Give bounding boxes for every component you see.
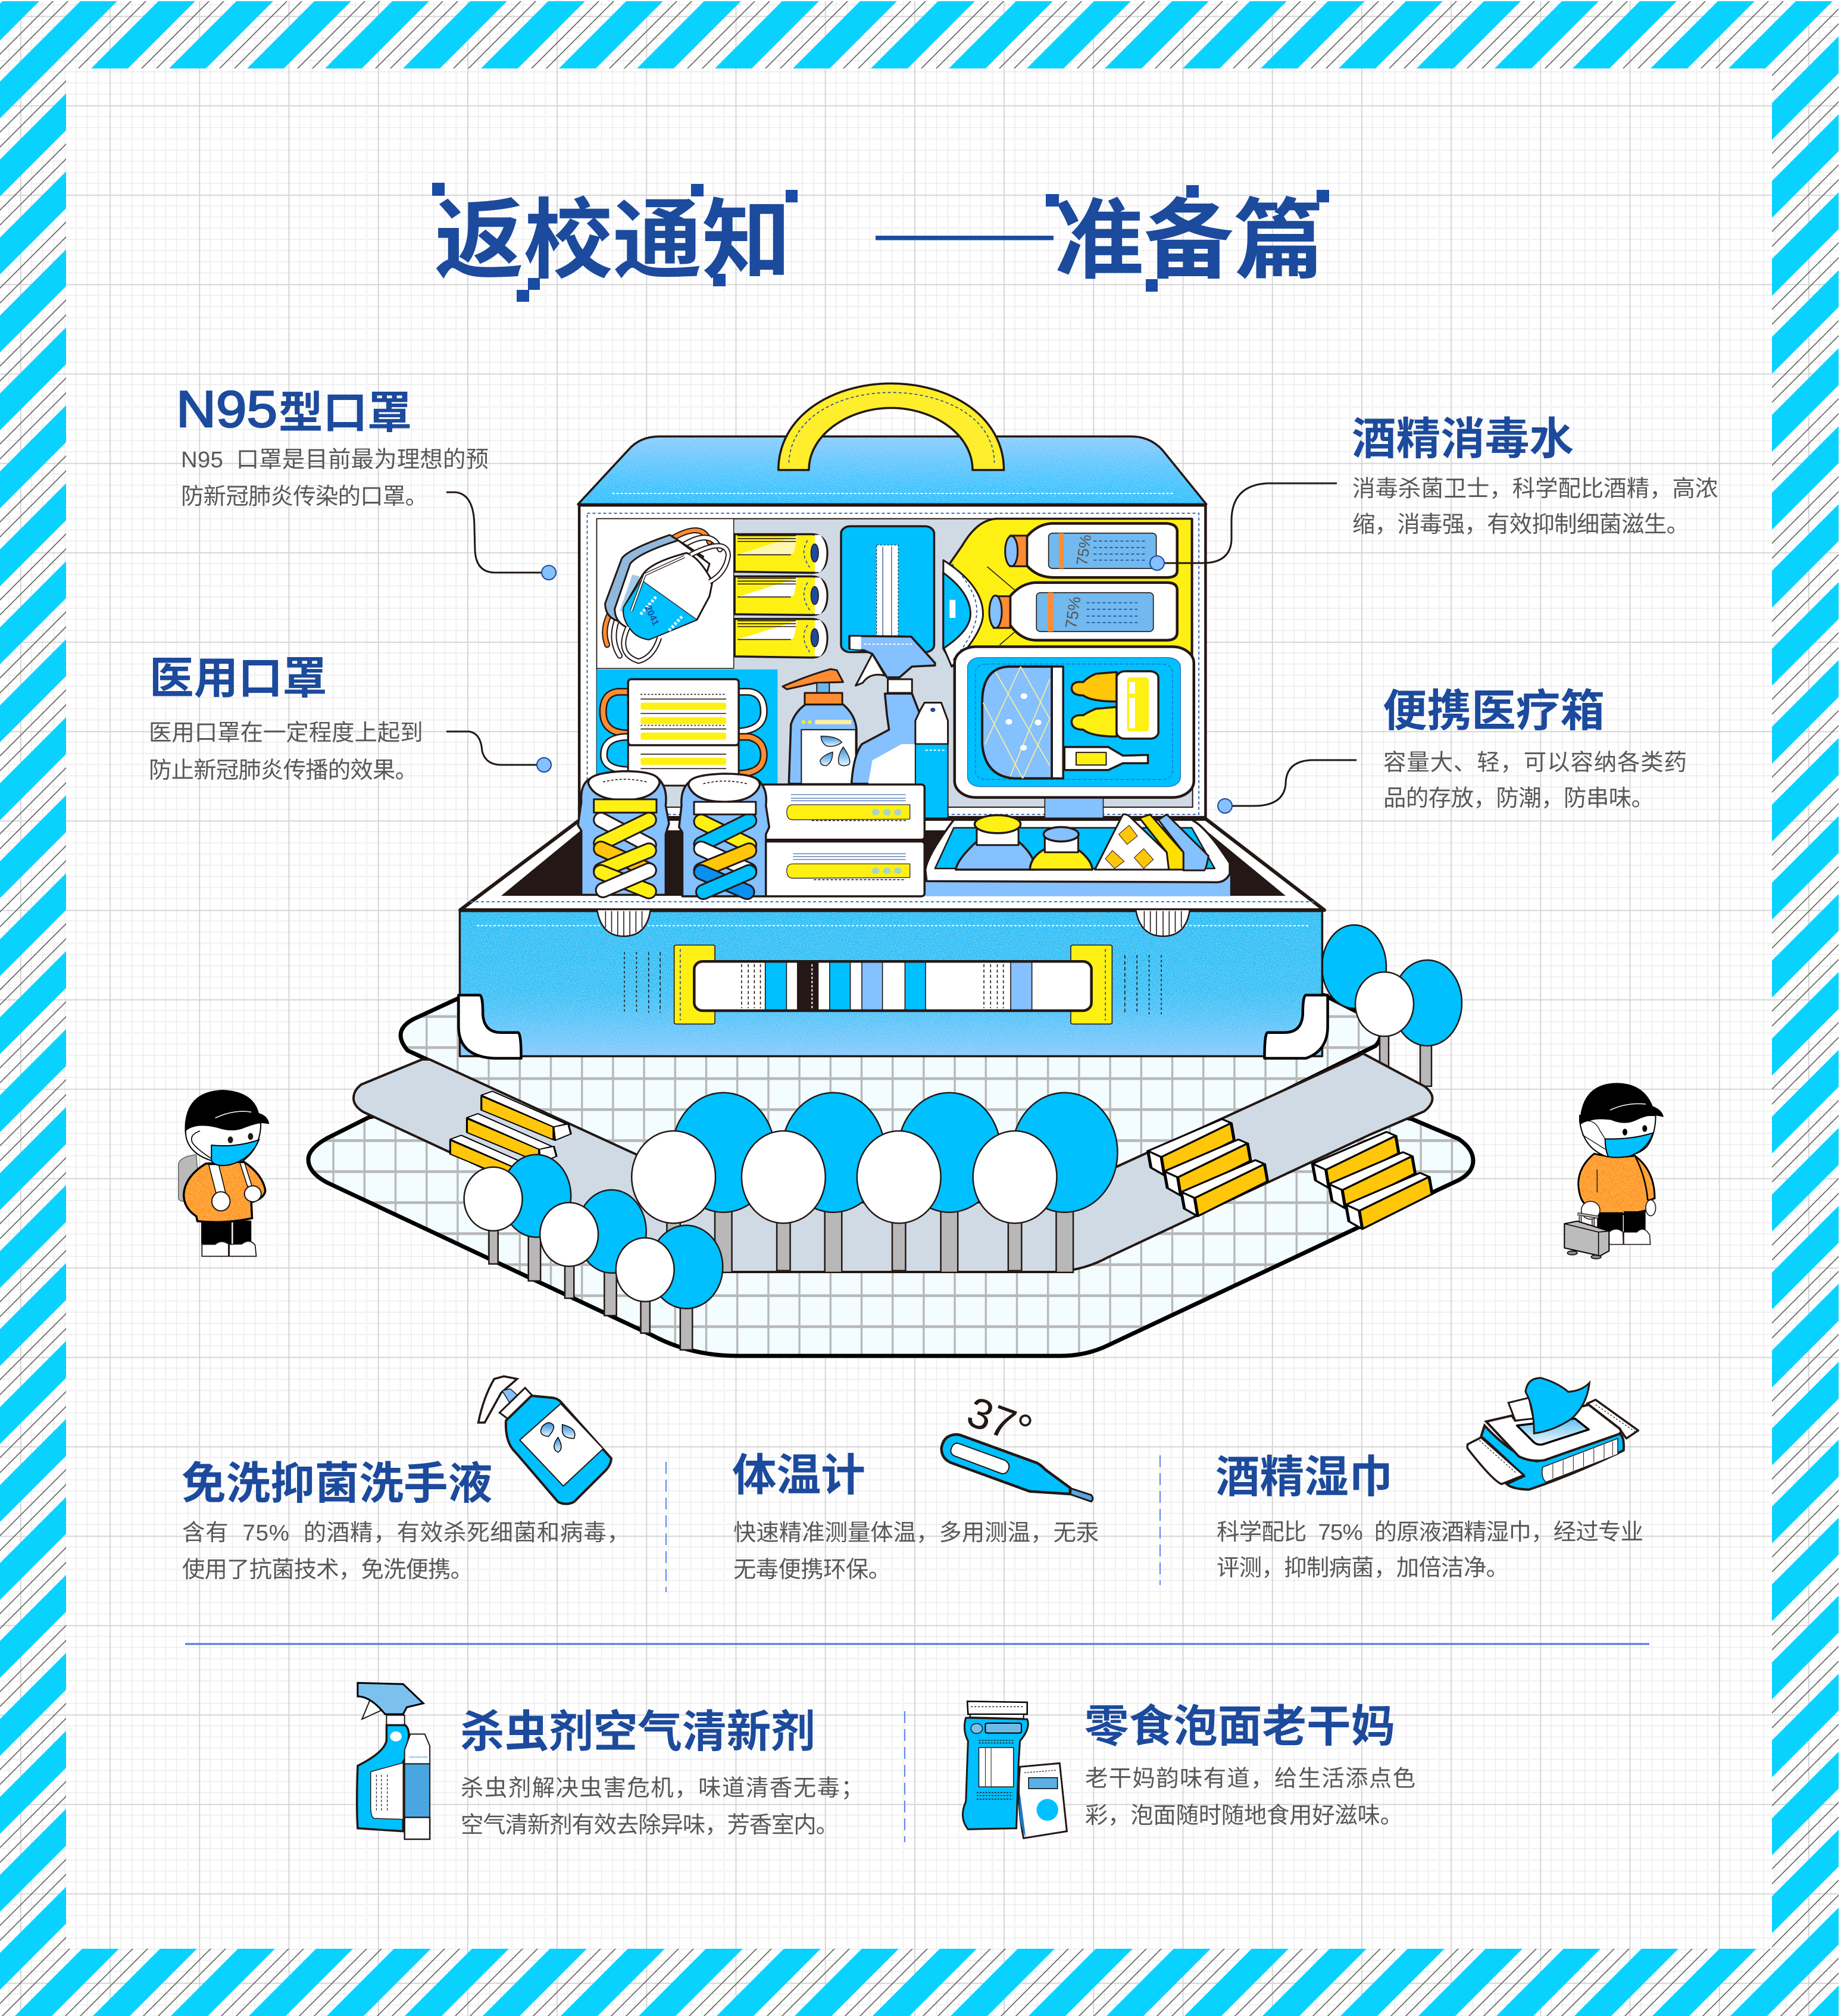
rolls of tissue — [734, 535, 827, 658]
tree row — [464, 1093, 1118, 1350]
medical case: open lower tray — [460, 819, 1324, 910]
bottle label 75% text: 75% — [1073, 533, 1095, 567]
inner medical kit — [955, 647, 1194, 818]
mask packet — [597, 670, 777, 786]
text block: medical case: 品的存放，防潮，防串味。 — [1383, 786, 1654, 811]
text block: thermometer: 无毒便携环保。 — [733, 1557, 891, 1583]
soap pump bottle — [783, 669, 857, 784]
divider — [665, 1462, 667, 1592]
text block: alcohol: 缩，消毒强，有效抑制细菌滋生。 — [1352, 512, 1689, 537]
icon: thermometer: 37° — [961, 1388, 1038, 1455]
text block: insecticide and air freshener: 杀虫剂解决虫害危机，味道清香无毒； — [461, 1776, 864, 1801]
horizontal rule — [185, 1643, 1649, 1645]
icon: spray and air freshener — [357, 1683, 430, 1839]
stitching dots — [624, 952, 1161, 1014]
back trees right of the case — [1322, 925, 1462, 1086]
platform: upper tier with tile grid — [401, 993, 1380, 1202]
mask pouch right — [679, 774, 769, 896]
text block: N95 mask: 型口罩 — [279, 387, 412, 437]
handle — [779, 383, 1004, 470]
text block: N95 mask: 防新冠肺炎传染的口罩。 — [181, 484, 428, 510]
carry strap — [674, 945, 1112, 1024]
text block: surgical mask: 防止新冠肺炎传播的效果。 — [149, 758, 418, 783]
icon: hand sanitizer — [479, 1376, 611, 1504]
text block: hand sanitizer — [182, 1458, 630, 1583]
lid inner panel — [579, 505, 1205, 817]
mask box stack — [762, 784, 924, 896]
alcohol bottle one — [1005, 523, 1177, 577]
spray bottle — [849, 636, 948, 818]
text block: surgical mask: 医用口罩在一定程度上起到 — [149, 720, 423, 746]
stairs left — [450, 1091, 571, 1184]
text block: alcohol wipes — [1215, 1452, 1643, 1581]
text block: N95 mask: N95 — [176, 381, 277, 438]
kid with suitcase — [1564, 1083, 1664, 1259]
corner guards — [458, 995, 1328, 1058]
text block: hand sanitizer: 使用了抗菌技术，免洗便携。 — [182, 1557, 473, 1583]
icon: wet wipes — [1467, 1378, 1638, 1490]
text block: hand sanitizer: 免洗抑菌洗手液 — [182, 1458, 492, 1508]
text block: hand sanitizer: 含有 75% 的酒精，有效杀死细菌和病毒， — [182, 1520, 630, 1546]
lid top — [578, 436, 1207, 504]
text block: insecticide and air freshener: 杀虫剂空气清新剂 — [460, 1706, 815, 1756]
callout line: surgical mask — [446, 732, 551, 772]
text block: alcohol — [1352, 414, 1718, 537]
text block: alcohol wipes: 科学配比 75% 的原液酒精湿巾，经过专业 — [1217, 1520, 1643, 1545]
callout line: medical case — [1218, 760, 1356, 813]
latches — [597, 909, 1190, 936]
icon: chili jar and noodle packet — [962, 1701, 1067, 1838]
title — [432, 183, 1329, 302]
kid with backpack — [179, 1090, 269, 1257]
text block: snacks — [1084, 1701, 1415, 1829]
N95 masks — [597, 518, 734, 668]
text block: thermometer: 快速精准测量体温，多用测温，无汞 — [733, 1520, 1099, 1546]
divider — [1159, 1455, 1161, 1585]
text block: alcohol: 酒精消毒水 — [1352, 414, 1574, 464]
text block: insecticide and air freshener: 空气清新剂有效去除异味，芳香室内。 — [461, 1812, 839, 1838]
text block: snacks: 零食泡面老干妈 — [1084, 1701, 1395, 1751]
text block: alcohol: 消毒杀菌卫士，科学配比酒精，高浓 — [1352, 476, 1718, 502]
road — [354, 1054, 1432, 1272]
bottle label 75% text: 75% — [1062, 595, 1084, 630]
mask pouch left — [578, 771, 669, 895]
wet wipe pack — [841, 526, 934, 652]
icon: thermometer — [942, 1388, 1093, 1502]
yellow bottle pouch — [943, 518, 1192, 667]
tray with jars and blister packs — [924, 814, 1230, 896]
medical case: front body — [458, 909, 1328, 1058]
title: 返校通知 — [435, 192, 791, 290]
text block: alcohol wipes: 酒精湿巾 — [1215, 1452, 1393, 1502]
text block: snacks: 彩，泡面随时随地食用好滋味。 — [1085, 1803, 1403, 1829]
text block: medical case: 便携医疗箱 — [1383, 686, 1605, 736]
bottle label 75% text: 2041 — [642, 604, 661, 627]
callout line: alcohol — [1150, 483, 1337, 570]
text block: medical case: 容量大、轻，可以容纳各类药 — [1383, 750, 1687, 776]
text block: snacks: 老干妈韵味有道，给生活添点色 — [1085, 1766, 1415, 1792]
text block: alcohol wipes: 评测，抑制病菌，加倍洁净。 — [1217, 1555, 1509, 1581]
callout line: N95 — [446, 492, 556, 580]
text block: surgical mask: 医用口罩 — [149, 653, 327, 703]
text block: insecticide and air freshener — [460, 1706, 864, 1838]
title: 准备篇 — [1054, 192, 1324, 290]
text block: thermometer — [732, 1450, 1099, 1583]
platform: lower tier with tile grid — [308, 1012, 1473, 1356]
text block: thermometer: 体温计 — [732, 1450, 865, 1500]
divider — [904, 1711, 905, 1842]
text block: surgical mask — [149, 653, 423, 783]
text block: N95 mask — [176, 381, 489, 510]
medical case: lid and contents — [578, 383, 1230, 896]
bottle label 75% text — [642, 533, 1095, 630]
text block: medical case — [1383, 686, 1687, 811]
suitcase — [1564, 1214, 1609, 1259]
stairs right — [1148, 1119, 1432, 1229]
text block: N95 mask: N95 口罩是目前最为理想的预 — [181, 447, 489, 473]
alcohol bottle two — [989, 583, 1177, 640]
